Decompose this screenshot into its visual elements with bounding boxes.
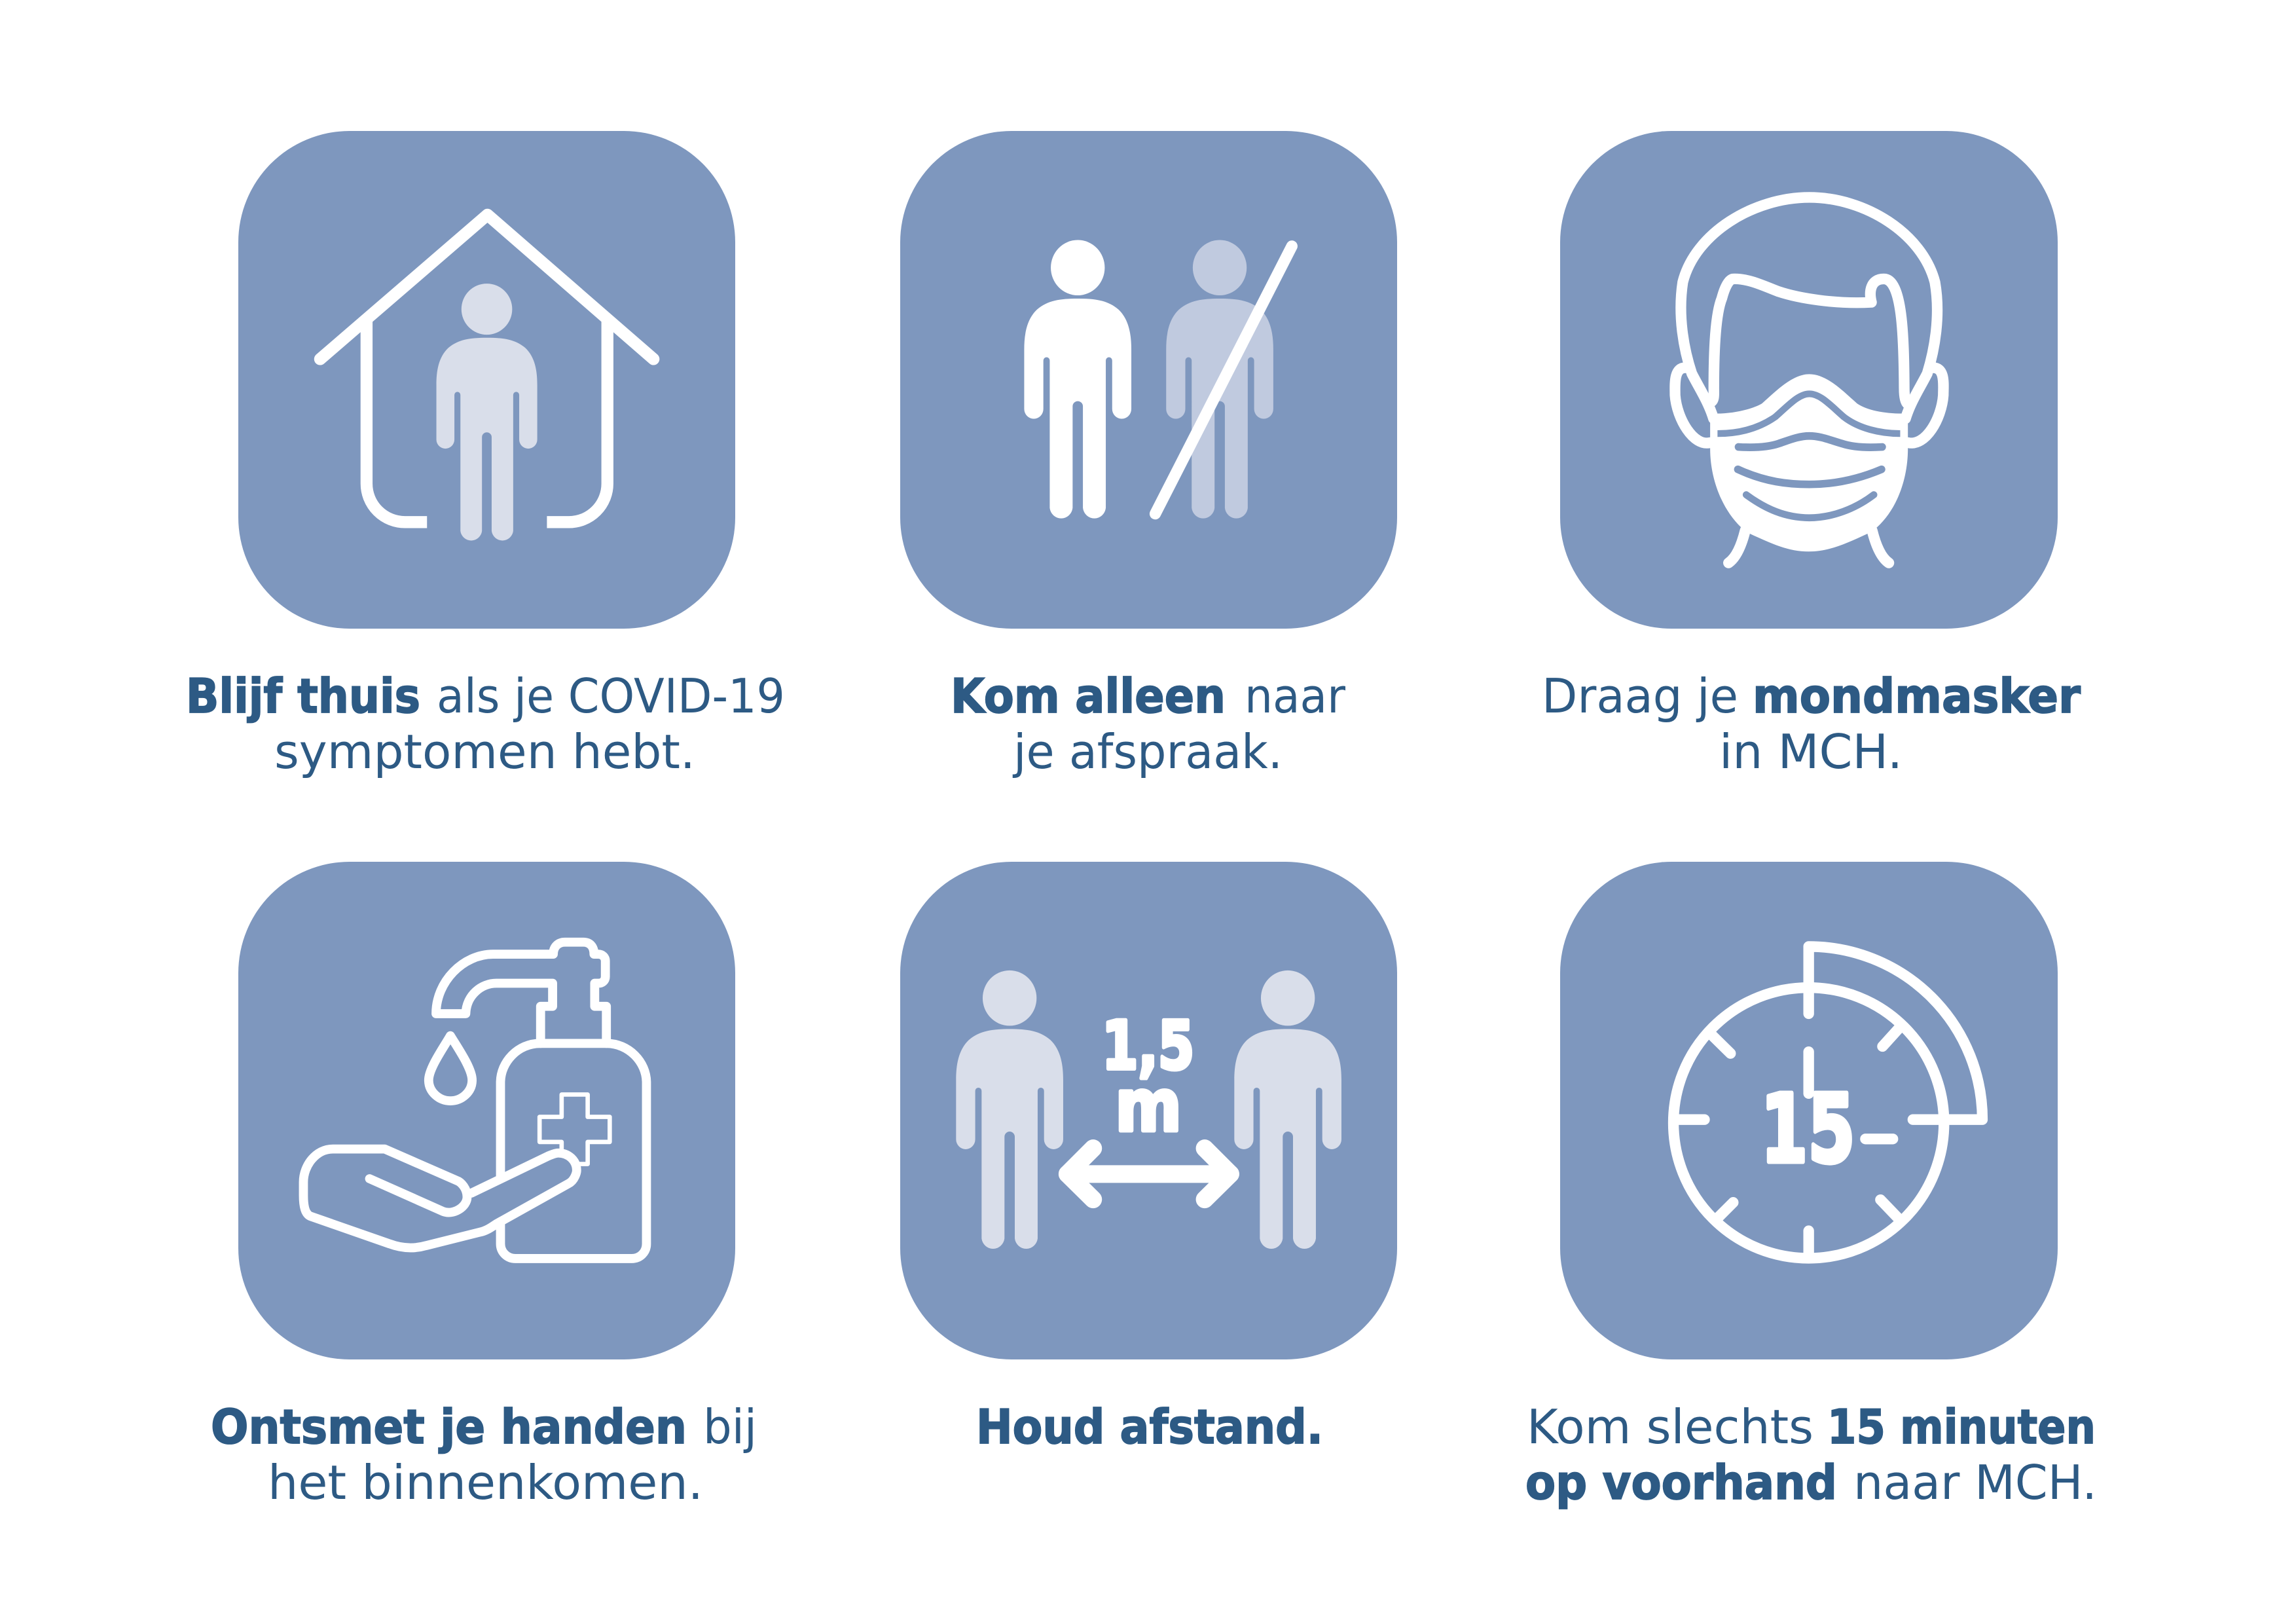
card background: come alone — [900, 131, 1397, 629]
head and hair — [1675, 197, 1944, 563]
distance label — [1102, 1007, 1194, 1148]
caption: disinfect hands: het binnenkomen. — [268, 1455, 703, 1510]
caption: stay home: symptomen hebt. — [274, 724, 695, 779]
caption: disinfect hands: Ontsmet je handen — [211, 1399, 687, 1454]
icon: clock with 15 — [1673, 946, 1982, 1258]
house outline — [320, 215, 653, 522]
panel: stay home — [186, 131, 785, 779]
caption: 15 minutes: naar MCH. — [1853, 1455, 2097, 1510]
caption: come alone: je afspraak. — [1012, 724, 1283, 779]
caption: stay home: als je COVID-19 — [437, 669, 785, 724]
caption: stay home: Blijf thuis — [186, 669, 420, 724]
distance label: m — [1115, 1064, 1182, 1148]
caption: wear mask — [1542, 669, 2081, 779]
caption: come alone: naar — [1245, 669, 1345, 724]
card background: keep distance — [900, 862, 1397, 1359]
caption: 15 minutes: 15 minuten — [1827, 1399, 2096, 1454]
panel: disinfect hands — [211, 862, 757, 1510]
caption: 15 minutes — [1525, 1399, 2097, 1510]
caption: keep distance: Houd afstand. — [976, 1399, 1323, 1454]
slash — [1156, 246, 1292, 514]
icon: face with mask — [1675, 197, 1944, 563]
distance label: 1,5 — [1102, 1007, 1194, 1085]
caption: come alone: Kom alleen — [951, 669, 1226, 724]
number 15: 15 — [1760, 1074, 1855, 1184]
drop — [429, 1036, 472, 1101]
caption: 15 minutes: op voorhand — [1525, 1455, 1837, 1510]
caption: wear mask: mondmasker — [1753, 669, 2081, 724]
person — [437, 284, 538, 540]
bottle — [436, 942, 646, 1259]
panel: arrive 15 minutes early — [1525, 862, 2097, 1510]
cross — [539, 1094, 610, 1164]
mask — [1710, 374, 1908, 551]
caption: disinfect hands — [211, 1399, 757, 1510]
panel: come alone — [900, 131, 1397, 779]
person left — [956, 970, 1063, 1249]
panel: keep distance — [900, 862, 1397, 1454]
person: allowed — [1024, 240, 1131, 519]
icon: two people 1,5 m apart — [956, 970, 1341, 1249]
caption: 15 minutes: Kom slechts — [1527, 1399, 1813, 1454]
caption: stay home — [186, 669, 785, 779]
icon: hand under sanitizer pump — [303, 942, 646, 1259]
hand — [303, 1149, 577, 1248]
person: crossed out — [1166, 240, 1273, 519]
double arrow — [1067, 1149, 1230, 1200]
clock face and ticks — [1673, 946, 1982, 1258]
icon: two people, one crossed out — [1024, 240, 1292, 519]
caption: wear mask: Draag je — [1542, 669, 1738, 724]
person right — [1234, 970, 1341, 1249]
card background: wear mask — [1560, 131, 2058, 629]
caption: wear mask: in MCH. — [1719, 724, 1903, 779]
card background: 15 minutes — [1560, 862, 2058, 1359]
card background: disinfect hands — [238, 862, 735, 1359]
mask folds — [1717, 394, 1900, 518]
icon: person in house — [320, 215, 653, 540]
panel: wear mask — [1542, 131, 2081, 779]
caption: disinfect hands: bij — [703, 1399, 757, 1454]
card background: stay home — [238, 131, 735, 629]
caption: come alone — [951, 669, 1345, 779]
